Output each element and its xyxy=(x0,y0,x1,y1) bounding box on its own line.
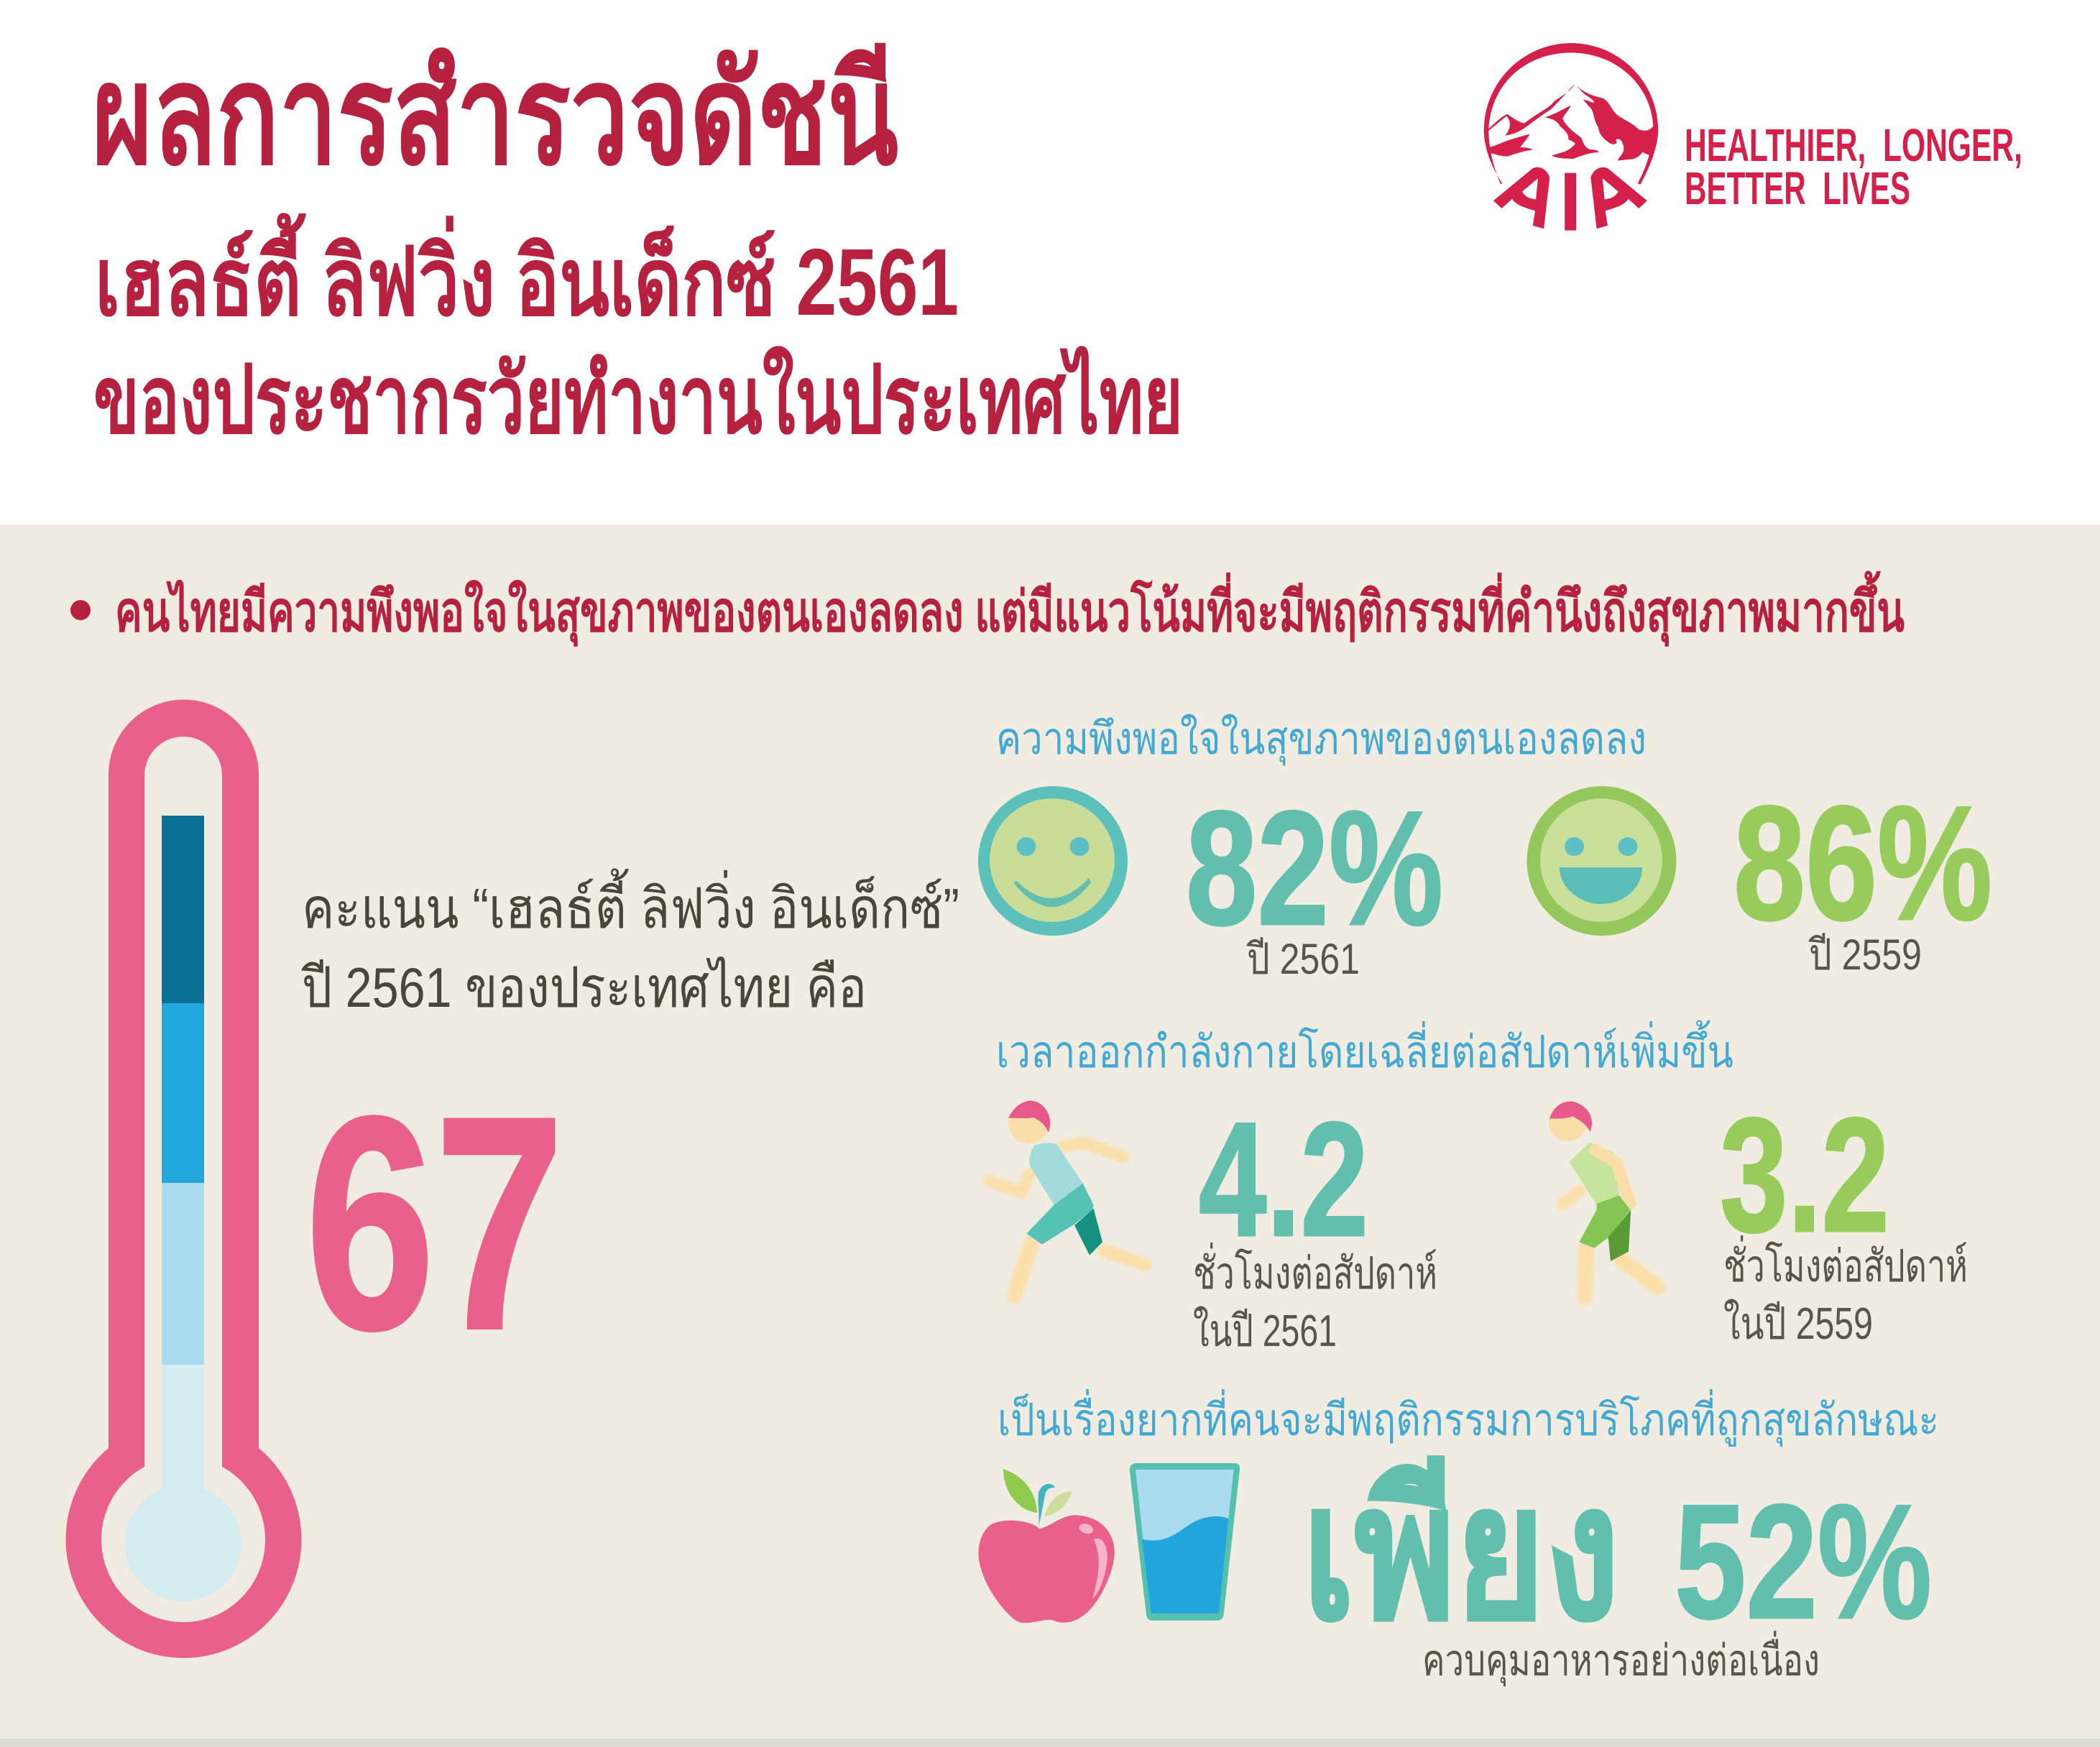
heading: consumption: เป็นเรื่องยากที่คนจะมีพฤติกรรมการบริโภคที่ถูกสุขลักษณะ xyxy=(998,1389,1939,1447)
logo letters AIA xyxy=(1493,167,1647,231)
score label xyxy=(301,868,959,1019)
title line 1: ผลการสำรวจดัชนี xyxy=(92,37,898,193)
logo mountain xyxy=(1488,84,1657,160)
stat 3.2 hours: 3.2 xyxy=(1720,1084,1889,1266)
year 2561 label: ปี 2561 xyxy=(1246,935,1360,983)
heading: satisfaction: ความพึงพอใจในสุขภาพของตนเองลดลง xyxy=(996,714,1647,765)
title block xyxy=(92,37,1183,453)
year 2559 label: ปี 2559 xyxy=(1808,931,1922,979)
caption line 2: ในปี 2559 xyxy=(1723,1299,1873,1349)
heading: exercise: เวลาออกกำลังกายโดยเฉลี่ยต่อสัปดาห์เพิ่มขึ้น xyxy=(996,1020,1733,1077)
tagline line 2: BETTER LIVES xyxy=(1685,162,1910,214)
score label line 2: ปี 2561 ของประเทศไทย คือ xyxy=(301,956,867,1019)
AIA logo xyxy=(1484,43,1658,231)
stat 52 percent: 52% xyxy=(1675,1470,1932,1652)
title line 2: เฮลธ์ตี้ ลิฟวิ่ง อินเด็กซ์ 2561 xyxy=(95,212,959,335)
title line 3: ของประชากรวัยทำงานในประเทศไทย xyxy=(93,346,1183,453)
stat 4.2 hours: 4.2 xyxy=(1199,1088,1368,1270)
logo tagline xyxy=(1685,119,2022,214)
icon: big smile face 2559 xyxy=(1526,786,1676,936)
stat word only: เพียง xyxy=(1302,1449,1620,1658)
headline with bullet xyxy=(70,571,1905,647)
thermometer xyxy=(65,700,301,1658)
caption hours per week 2561 xyxy=(1193,1243,1437,1356)
stat 82 percent: 82% xyxy=(1186,777,1443,959)
thermometer outline xyxy=(65,700,301,1658)
fluid segment palest with bulb xyxy=(125,1365,241,1601)
fluid segment mid blue xyxy=(162,1003,204,1183)
caption hours per week 2559 xyxy=(1723,1235,1968,1349)
page background panel xyxy=(0,525,2100,1747)
fluid segment light blue xyxy=(162,1183,204,1365)
icon: glass of water xyxy=(1130,1463,1240,1621)
stat 86 percent: 86% xyxy=(1733,772,1992,954)
logo ring xyxy=(1484,43,1658,185)
icon: smile face 2561 xyxy=(978,786,1128,936)
score value 67: 67 xyxy=(305,1054,564,1393)
caption diet control: ควบคุมอาหารอย่างต่อเนื่อง xyxy=(1422,1631,1820,1687)
icon: apple xyxy=(978,1469,1115,1623)
icon: runner green xyxy=(1549,1102,1658,1297)
bullet dot xyxy=(70,600,91,620)
icon: runner blue xyxy=(990,1101,1145,1296)
bottom band xyxy=(0,1738,2100,1747)
score label line 1: คะแนน “เฮลธ์ตี้ ลิฟวิ่ง อินเด็กซ์” xyxy=(302,868,959,940)
thermometer interior xyxy=(101,737,265,1622)
caption line 2: ในปี 2561 xyxy=(1193,1306,1337,1356)
caption line 1: ชั่วโมงต่อสัปดาห์ xyxy=(1193,1243,1437,1299)
caption line 1: ชั่วโมงต่อสัปดาห์ xyxy=(1723,1235,1968,1291)
fluid segment darkest xyxy=(162,816,204,1003)
